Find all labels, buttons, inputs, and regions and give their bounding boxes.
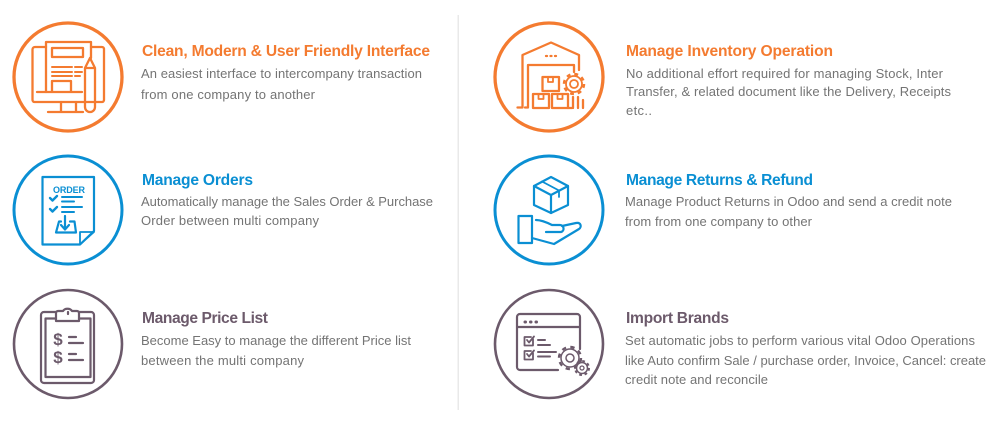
description <box>141 333 411 368</box>
heading: Manage Price List <box>142 310 268 327</box>
heading: Clean, Modern & User Friendly Interface <box>142 43 430 60</box>
feature: import brands <box>495 290 986 398</box>
icon: order document: ORDER <box>53 185 86 195</box>
description: Transfer, & related document like the Delivery, Receipts <box>626 84 952 99</box>
feature: manage orders <box>14 156 433 264</box>
description: credit note and reconcile <box>625 372 768 387</box>
description: Automatically manage the Sales Order & Purchase <box>141 194 433 209</box>
description: like Auto confirm Sale / purchase order, Invoice, Cancel: create <box>625 353 986 368</box>
description: from one company to another <box>141 87 316 102</box>
heading: Manage Orders <box>142 172 253 189</box>
heading: Import Brands <box>626 310 729 327</box>
icon: price clipboard: $ <box>53 330 63 349</box>
description <box>141 66 422 102</box>
feature: returns and refund <box>495 156 952 264</box>
description: Order between multi company <box>141 213 320 228</box>
description: Manage Product Returns in Odoo and send a credit note <box>625 194 952 209</box>
description <box>141 194 433 228</box>
description: An easiest interface to intercompany transaction <box>141 66 422 81</box>
icon: box over open hand <box>495 156 603 264</box>
description <box>625 333 986 387</box>
feature: clean interface <box>14 23 430 131</box>
description: from from one company to other <box>625 214 813 229</box>
icon: price clipboard <box>14 290 122 398</box>
feature: inventory operation <box>495 23 952 131</box>
description: No additional effort required for managing Stock, Inter <box>626 66 944 81</box>
icon: monitor, document and pencil <box>14 23 122 131</box>
icon: price clipboard: $ <box>53 348 63 367</box>
icon: warehouse with boxes and gear <box>495 23 603 131</box>
description: etc.. <box>626 103 652 118</box>
description <box>625 194 952 229</box>
description: between the multi company <box>141 353 304 368</box>
heading: Manage Returns & Refund <box>626 172 813 189</box>
description <box>626 66 952 118</box>
description: Become Easy to manage the different Price list <box>141 333 411 348</box>
icon: order document <box>14 156 122 264</box>
description: Set automatic jobs to perform various vital Odoo Operations <box>625 333 976 348</box>
icon: browser window with checklist and gears <box>495 290 603 398</box>
heading: Manage Inventory Operation <box>626 43 833 60</box>
feature: manage price list <box>14 290 411 398</box>
